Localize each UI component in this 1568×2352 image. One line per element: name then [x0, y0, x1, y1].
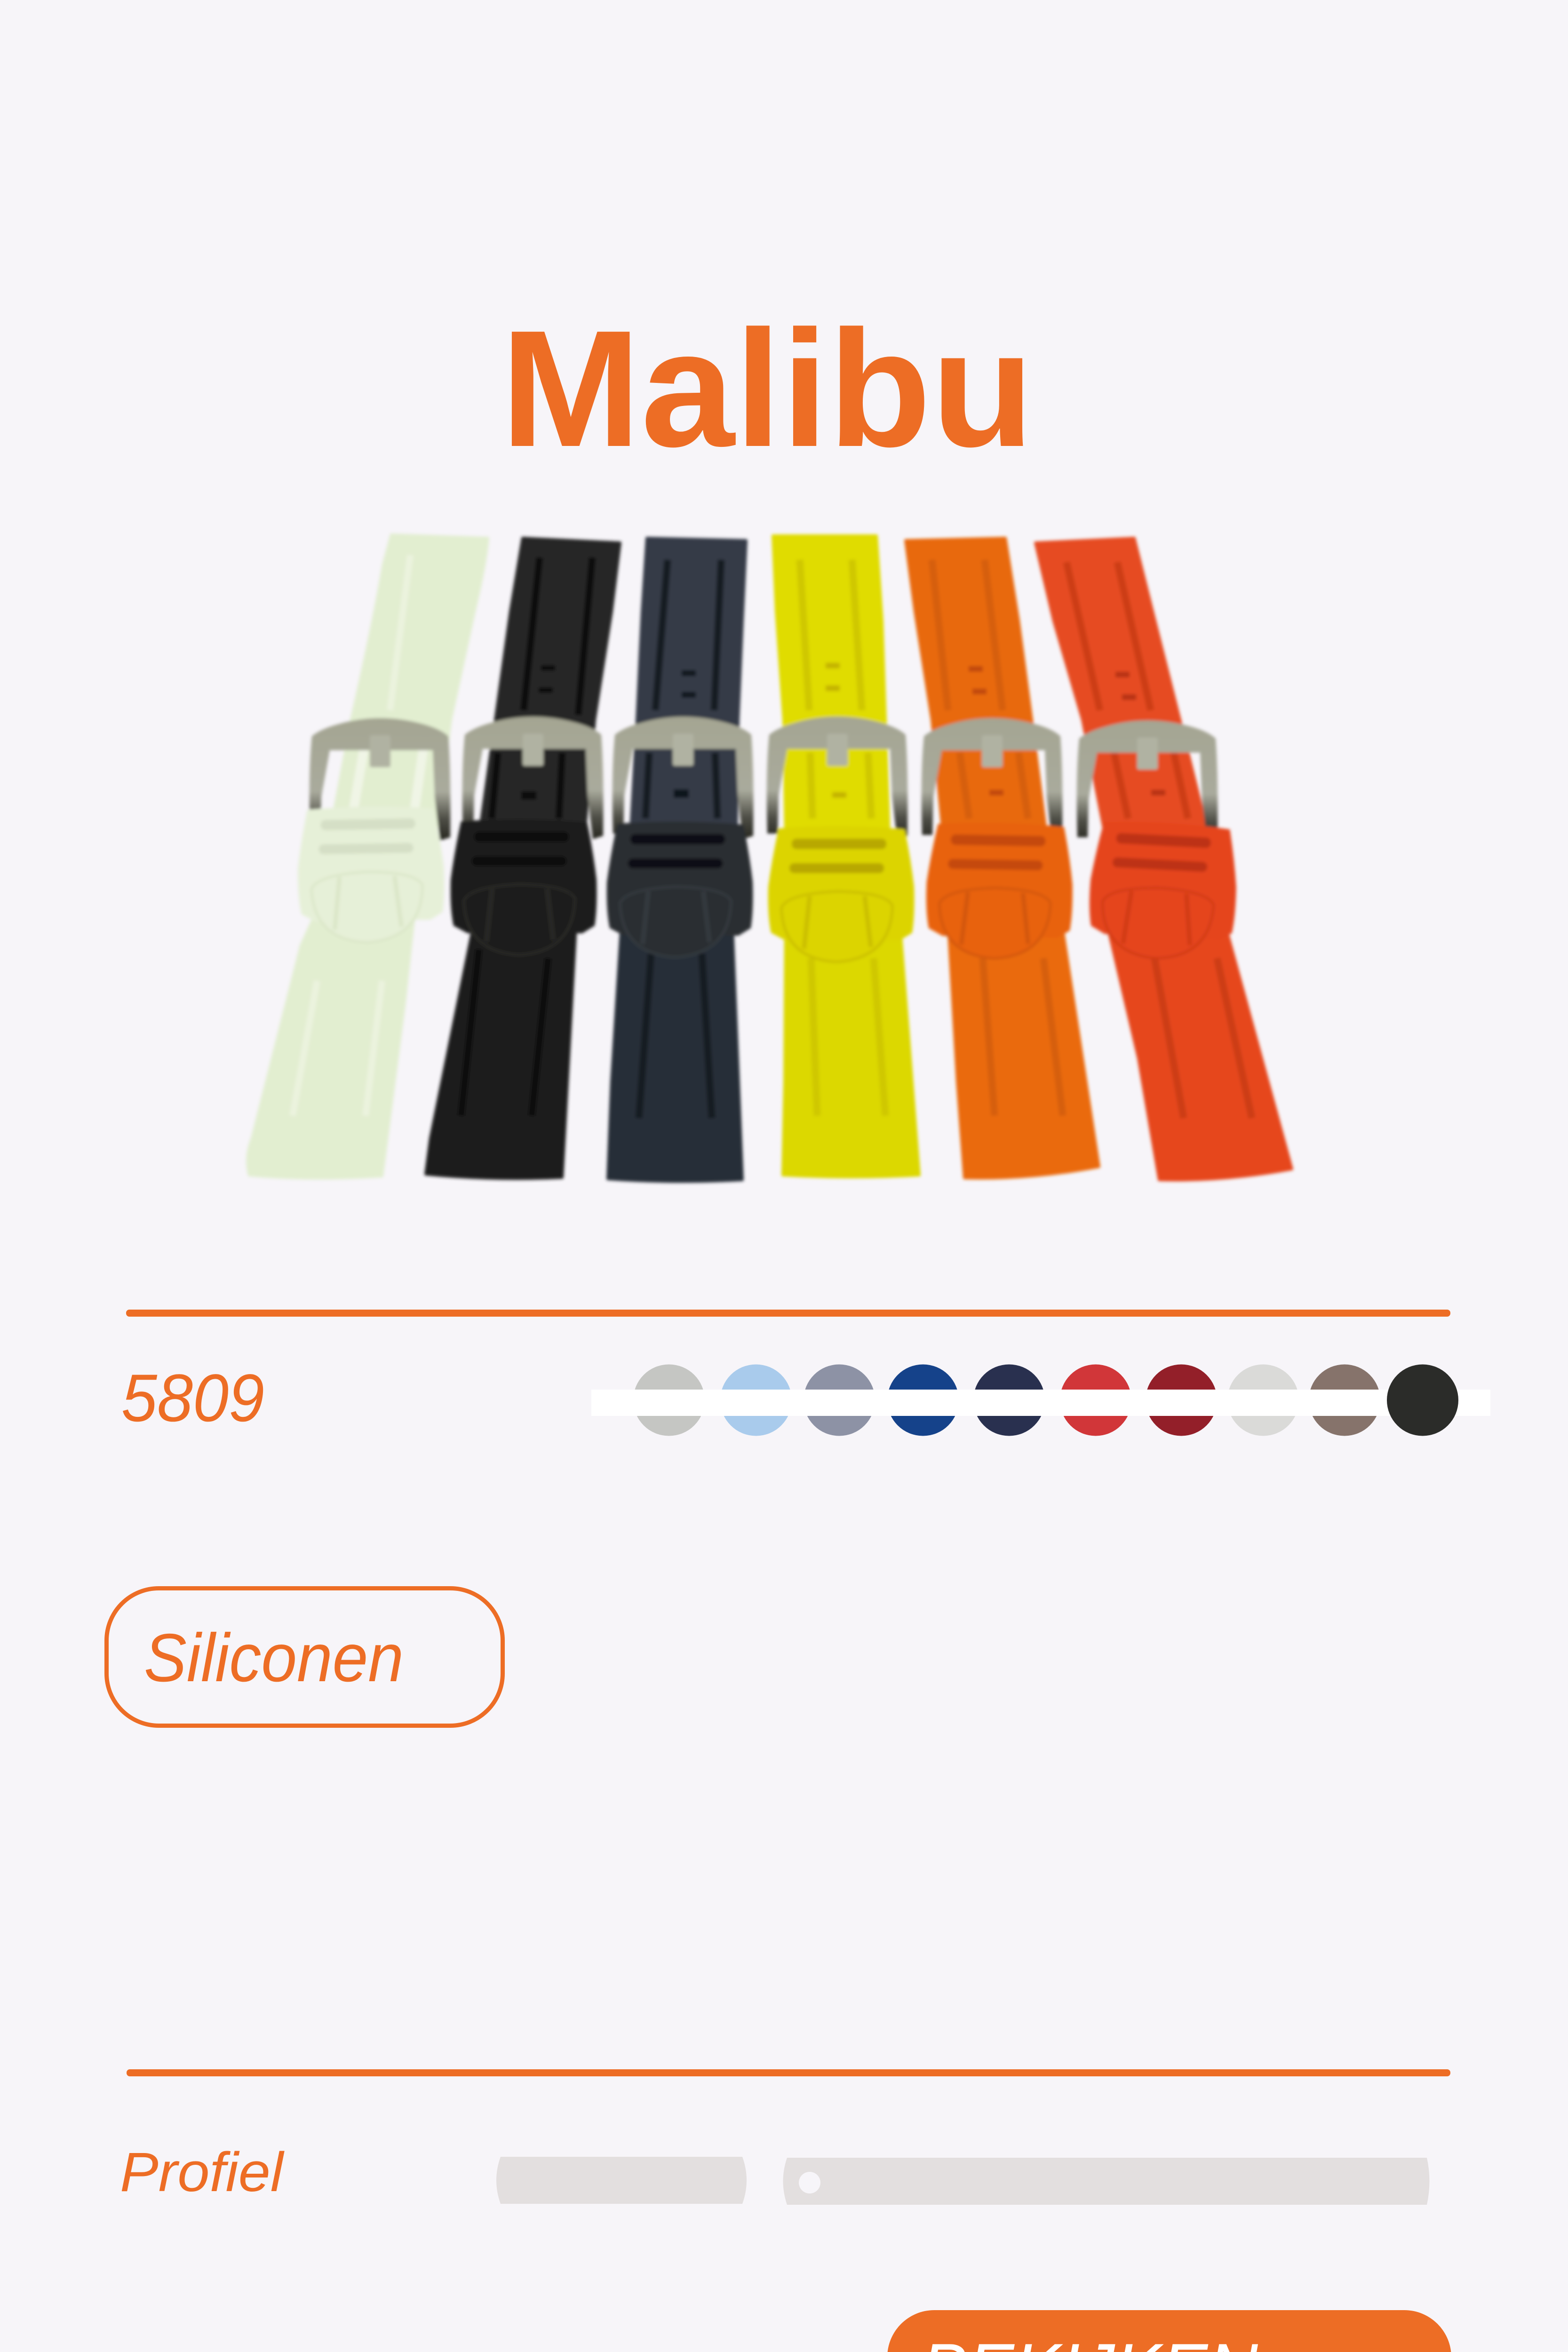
swatch: pale grey [1227, 1364, 1299, 1436]
swatch: grey blue [804, 1364, 875, 1436]
article number: 5809 [121, 1361, 264, 1436]
profile: cross-section small [496, 2157, 747, 2204]
profile: cross-section long [783, 2158, 1429, 2205]
swatch: blue [887, 1364, 959, 1436]
tag outline [106, 1588, 502, 1725]
divider: bottom [127, 2069, 1450, 2076]
long bar [783, 2158, 1429, 2205]
colour swatches [591, 1364, 1490, 1436]
strap: white [247, 535, 488, 1178]
divider: top [126, 1310, 1450, 1317]
swatch: light blue [720, 1364, 792, 1436]
hole [799, 2172, 820, 2193]
strap: navy [607, 538, 754, 1182]
swatch: taupe [1309, 1364, 1380, 1436]
title: Malibu [501, 295, 1034, 481]
swatch: black [1387, 1364, 1458, 1436]
strap: black [426, 538, 620, 1178]
strap: red-orange [1035, 538, 1292, 1180]
button background [887, 2310, 1451, 2352]
swatch: dark red [1146, 1364, 1217, 1436]
profile label: Profiel [120, 2141, 285, 2203]
strap: yellow [767, 536, 919, 1177]
white band across swatches [591, 1390, 1490, 1416]
tag label: Siliconen [144, 1620, 404, 1696]
product image: six watch straps [247, 535, 1292, 1182]
swatch: red [1060, 1364, 1131, 1436]
swatch: navy [973, 1364, 1045, 1436]
swatch: light grey [633, 1364, 705, 1436]
material tag [106, 1588, 502, 1725]
button [887, 2310, 1451, 2352]
strap: orange [906, 538, 1099, 1178]
